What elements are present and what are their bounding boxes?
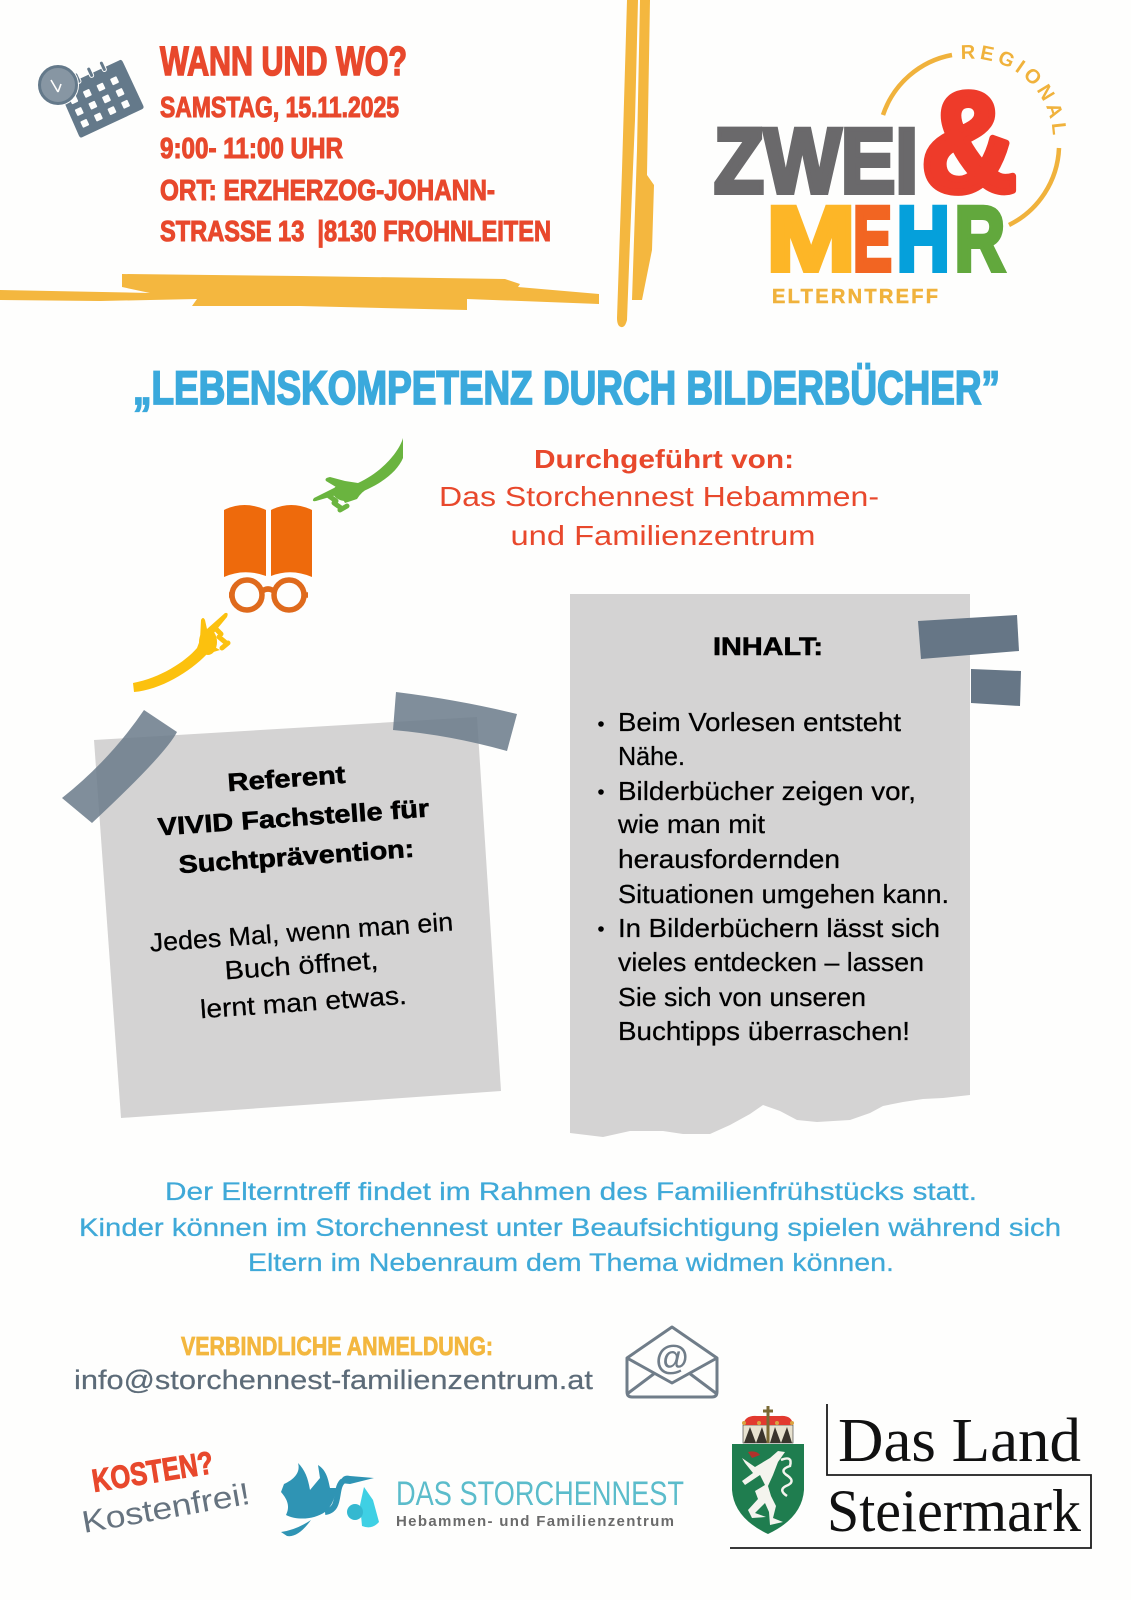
referent body text: lernt man etwas. <box>199 980 408 1024</box>
logo word: regional: REGIONAL <box>962 45 1066 135</box>
icon: calendar with clock <box>37 53 144 138</box>
content list text: Situationen umgehen kann. <box>618 879 949 909</box>
icon: email envelope: @ <box>655 1339 689 1377</box>
logo: Das Land Steiermark <box>730 1404 1091 1548</box>
tape: lower <box>971 669 1021 706</box>
logo word: elterntreff: ELTERNTREFF <box>772 286 938 308</box>
referent body text: Jedes Mal, wenn man ein <box>149 906 454 958</box>
info paragraph: Eltern im Nebenraum dem Thema widmen können. <box>248 1249 894 1277</box>
icon: book with glasses <box>224 505 312 610</box>
content bullets <box>598 721 604 932</box>
logo word: Das Land: Das Land <box>838 1407 1081 1475</box>
icon: email envelope <box>627 1327 717 1397</box>
location line two: STRASSE 13 |8130 FROHNLEITEN <box>160 216 551 248</box>
time: 9:00- 11:00 UHR <box>160 133 343 165</box>
brush stroke: horizontal <box>0 274 599 310</box>
referent heading: Referent <box>227 761 347 797</box>
info paragraph: Kinder können im Storchennest unter Beaufsichtigung spielen während sich <box>79 1214 1061 1242</box>
logo word: mehr: M <box>766 188 856 290</box>
cost text: Kostenfrei! <box>79 1476 253 1540</box>
logo arc: lower <box>1009 148 1059 225</box>
tape: upper <box>918 615 1019 659</box>
info paragraph: Der Elterntreff findet im Rahmen des Familienfrühstücks statt. <box>165 1178 977 1206</box>
storchennest name: DAS STORCHENNEST <box>396 1475 684 1513</box>
registration email: info@storchennest-familienzentrum.at <box>74 1365 594 1395</box>
referent heading <box>157 761 430 879</box>
date: SAMSTAG, 15.11.2025 <box>160 92 399 124</box>
logo frame <box>730 1404 1091 1548</box>
logo: Das Storchennest <box>281 1463 684 1536</box>
when and where block <box>160 38 551 248</box>
logo word: mehr: E <box>853 188 892 290</box>
logo word: mehr: R <box>954 188 1005 290</box>
referent heading: Suchtprävention: <box>178 835 415 879</box>
content list text <box>617 707 949 1046</box>
logo word: mehr <box>766 188 1005 290</box>
location line one: ORT: ERZHERZOG-JOHANN- <box>160 175 495 207</box>
registration heading: VERBINDLICHE ANMELDUNG: <box>181 1331 493 1361</box>
tape: left corner <box>62 710 177 823</box>
content list text: Bilderbücher zeigen vor, <box>618 776 916 806</box>
content list text: Sie sich von unseren <box>618 982 866 1012</box>
content list text: Nähe. <box>618 741 685 771</box>
content list text: vieles entdecken – lassen <box>618 947 924 977</box>
content list text: Beim Vorlesen entsteht <box>618 707 902 737</box>
info paragraph <box>79 1178 1061 1277</box>
tape: right corner <box>393 692 517 751</box>
content list text: wie man mit <box>617 809 766 839</box>
organiser name line one: Das Storchennest Hebammen- <box>439 481 879 512</box>
coat of arms <box>732 1406 804 1534</box>
icon: green pointing hand <box>313 438 403 510</box>
referent heading: VIVID Fachstelle für <box>157 795 430 841</box>
stork icon <box>281 1463 379 1536</box>
referent body text <box>149 906 454 1024</box>
content list text: In Bilderbüchern lässt sich <box>618 913 940 943</box>
organiser label: Durchgeführt von: <box>534 444 794 474</box>
content list text: herausfordernden <box>618 844 840 874</box>
logo glyph: ampersand: & <box>921 63 1017 222</box>
logo: Zwei und Mehr Elterntreff <box>714 45 1066 308</box>
organiser name line two: und Familienzentrum <box>510 520 816 551</box>
brush stroke: vertical <box>617 0 654 327</box>
icon: yellow pointing hand <box>133 613 228 692</box>
logo word: zwei: ZWEI <box>714 110 918 212</box>
referent body text: Buch öffnet, <box>224 945 379 985</box>
content list text: Buchtipps überraschen! <box>618 1016 910 1046</box>
organiser block <box>439 444 879 551</box>
panel: content note <box>570 594 1021 1137</box>
logo word: Steiermark: Steiermark <box>827 1478 1081 1544</box>
storchennest subtitle: Hebammen- und Familienzentrum <box>396 1513 674 1530</box>
content heading: INHALT: <box>713 633 823 661</box>
logo arc: upper <box>883 55 952 115</box>
logo word: mehr: H <box>896 188 950 290</box>
heading: Wann und wo: WANN UND WO? <box>160 38 407 84</box>
panel: referent note <box>62 692 517 1118</box>
cost heading: KOSTEN? <box>89 1444 216 1499</box>
